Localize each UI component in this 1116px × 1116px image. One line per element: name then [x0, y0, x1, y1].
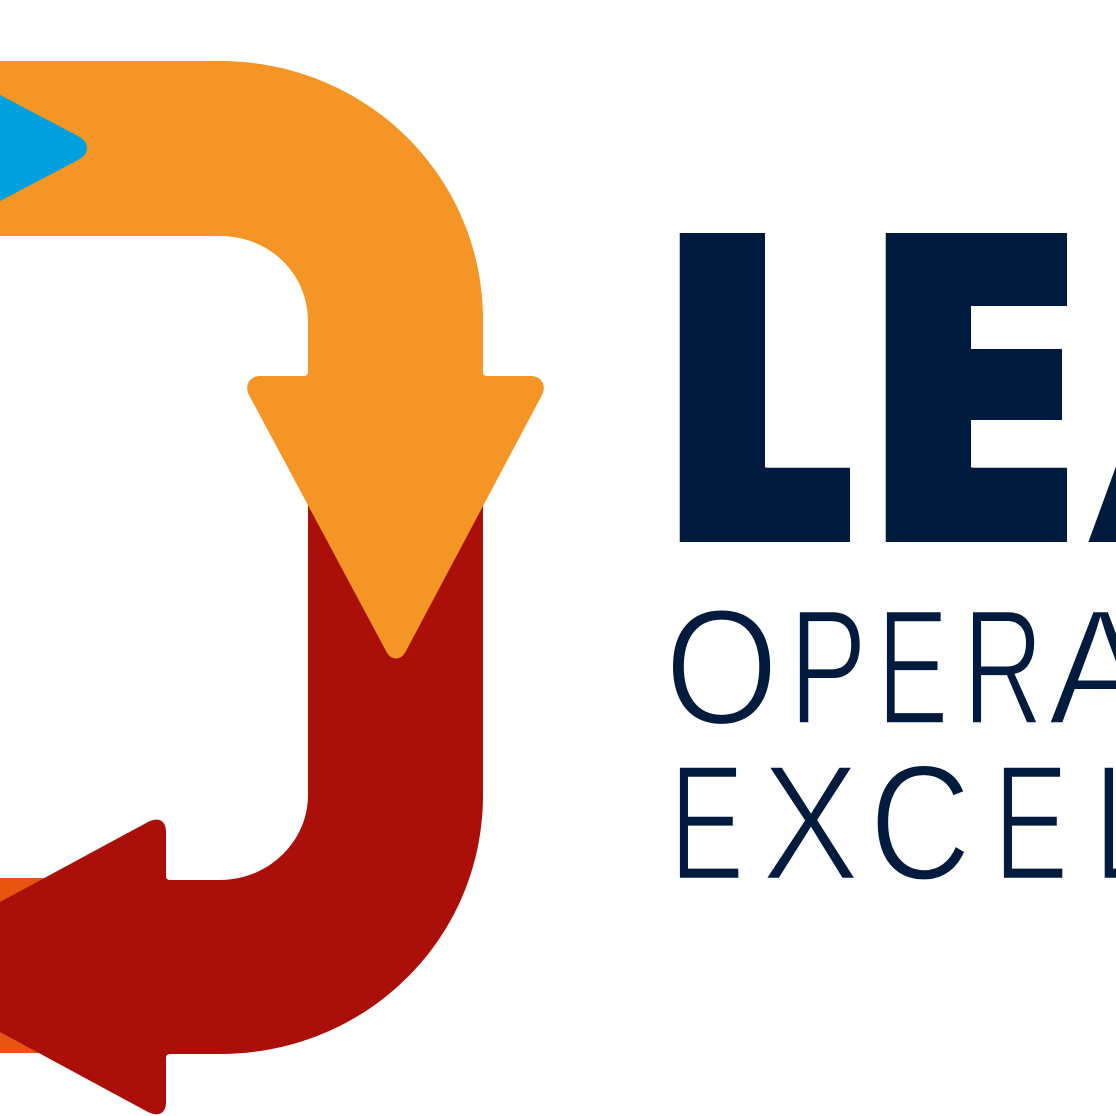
- icon: orange arrow: [0, 61, 544, 658]
- subheading: OPERATIONAL: [664, 574, 1116, 760]
- subheading: EXCELLENCE: [670, 730, 1116, 915]
- subheading: EXCELLENCE: C: [869, 730, 971, 915]
- subheading: OPERATIONAL: R: [963, 574, 1044, 759]
- icon: cycle arrows: [0, 61, 544, 1114]
- subheading: EXCELLENCE: X: [761, 731, 860, 915]
- heading: LEAN: L: [667, 160, 916, 614]
- heading: LEAN: [680, 233, 1116, 542]
- subheading: OPERATIONAL: P: [789, 575, 867, 760]
- subheading: OPERATIONAL: E: [877, 576, 949, 760]
- subheading: OPERATIONAL: O: [664, 576, 779, 760]
- subheading: EXCELLENCE: E: [994, 730, 1068, 915]
- subheading: EXCELLENCE: E: [670, 730, 744, 915]
- icon: dark orange arrow tail: [0, 878, 120, 1053]
- icon: red arrow: [0, 470, 483, 1114]
- icon: blue arrow: [0, 95, 87, 201]
